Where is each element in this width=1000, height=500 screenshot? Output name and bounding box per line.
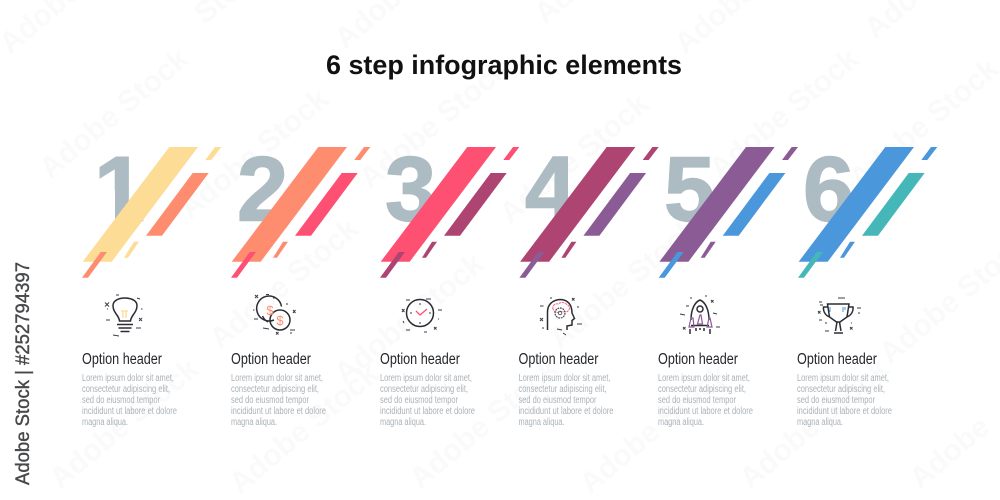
step 2 text: magna aliqua. — [231, 417, 277, 428]
text: Adobe Stock — [403, 352, 565, 495]
stock id label: Adobe Stock | #252794397 — [13, 262, 34, 485]
step 4 text — [518, 351, 614, 428]
step 4 text: Lorem ipsum dolor sit amet, — [518, 373, 610, 384]
step 4 text: incididunt ut labore et dolore — [518, 406, 614, 417]
step 1 text: consectetur adipiscing elit, — [82, 384, 170, 395]
step 1 text: incididunt ut labore et dolore — [82, 406, 177, 417]
step 3 text: Lorem ipsum dolor sit amet, — [380, 373, 472, 384]
step 3 text: sed do eiusmod tempor — [380, 395, 458, 406]
step 2 text — [231, 351, 326, 428]
step 2 text: Lorem ipsum dolor sit amet, — [231, 373, 323, 384]
step 1 text: Lorem ipsum dolor sit amet, — [82, 373, 174, 384]
step 4 text: consectetur adipiscing elit, — [518, 384, 606, 395]
icon: head with gear — [540, 298, 582, 335]
text: Adobe Stock — [33, 42, 195, 185]
text: Adobe Stock — [43, 352, 205, 495]
step 1 graphic — [82, 138, 221, 278]
text: Adobe Stock — [203, 212, 365, 355]
text: Adobe Stock — [543, 212, 705, 355]
step 3 text: incididunt ut labore et dolore — [380, 406, 475, 417]
text: Adobe Stock — [493, 87, 655, 230]
step 4 text: Option header — [518, 351, 598, 368]
text: Adobe Stock — [573, 357, 735, 500]
step 5 text — [658, 351, 753, 428]
step 3 text: magna aliqua. — [380, 417, 426, 428]
text: Adobe Stock — [223, 357, 385, 500]
step 3 graphic — [380, 138, 519, 278]
step 5 text: incididunt ut labore et dolore — [658, 406, 753, 417]
text: Adobe Stock — [733, 352, 895, 495]
step 2 text: consectetur adipiscing elit, — [231, 384, 319, 395]
text: Adobe Stock — [353, 52, 515, 195]
icon: light bulb — [105, 295, 142, 336]
step 6 text: Lorem ipsum dolor sit amet, — [797, 373, 889, 384]
text: Adobe Stock — [173, 82, 335, 225]
step 6 graphic — [798, 138, 937, 278]
step 2 graphic: 2 — [237, 138, 288, 240]
icon: trophy — [818, 298, 861, 333]
step 6 text: sed do eiusmod tempor — [797, 395, 875, 406]
step 3 text: consectetur adipiscing elit, — [380, 384, 468, 395]
step 6 text: magna aliqua. — [797, 417, 843, 428]
step 1 text: Option header — [82, 351, 162, 368]
step 5 text: sed do eiusmod tempor — [658, 395, 736, 406]
text: Adobe Stock — [328, 247, 490, 390]
step 4 graphic: 4 — [525, 138, 576, 240]
step 3 graphic: 3 — [385, 138, 436, 240]
text: Adobe Stock — [703, 42, 865, 185]
icon: coins — [253, 294, 296, 334]
step 4 text: magna aliqua. — [518, 417, 564, 428]
step 1 text: sed do eiusmod tempor — [82, 395, 160, 406]
step 5 text: Option header — [658, 351, 738, 368]
step 5 text: magna aliqua. — [658, 417, 704, 428]
step 6 text: consectetur adipiscing elit, — [797, 384, 885, 395]
step 2 text: incididunt ut labore et dolore — [231, 406, 326, 417]
icon: clock — [402, 299, 442, 332]
text: Adobe — [903, 410, 996, 495]
step 4 graphic — [519, 138, 659, 278]
step 6 text: Option header — [797, 351, 877, 368]
step 6 graphic: 6 — [803, 138, 854, 240]
step 6 text — [797, 351, 892, 428]
icon: coins: $ — [266, 303, 274, 318]
title: 6 step infographic elements — [326, 50, 682, 80]
step 5 graphic — [659, 138, 798, 278]
step 2 graphic — [231, 138, 370, 278]
step 5 text: consectetur adipiscing elit, — [658, 384, 746, 395]
icon: coins: $ — [276, 313, 284, 328]
step 1 graphic: 1 — [94, 138, 145, 240]
icon: rocket — [680, 296, 720, 334]
step 6 text: incididunt ut labore et dolore — [797, 406, 892, 417]
step 2 text: sed do eiusmod tempor — [231, 395, 309, 406]
step 3 text — [380, 351, 475, 428]
step 5 graphic: 5 — [664, 138, 715, 240]
step 1 text: magna aliqua. — [82, 417, 128, 428]
step 5 text: Lorem ipsum dolor sit amet, — [658, 373, 750, 384]
step 1 text — [82, 351, 177, 428]
step 3 text: Option header — [380, 351, 460, 368]
step 4 text: sed do eiusmod tempor — [518, 395, 597, 406]
step 2 text: Option header — [231, 351, 311, 368]
